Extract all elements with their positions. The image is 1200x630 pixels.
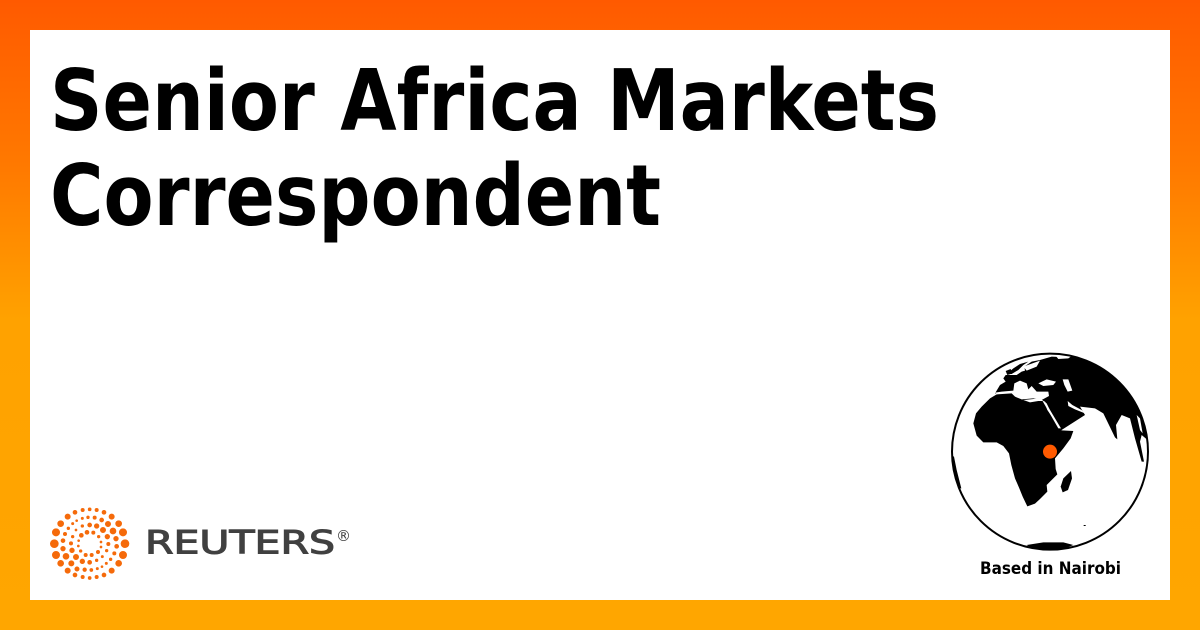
Scandinavia xyxy=(1007,362,1028,374)
Reuters wordmark: REUTERS xyxy=(145,524,335,562)
Madagascar xyxy=(1061,471,1072,492)
globe outline xyxy=(952,354,1148,550)
Antarctica xyxy=(1026,542,1074,549)
icon: Reuters dotted logo xyxy=(50,508,129,579)
Eurasia xyxy=(995,356,1146,462)
title xyxy=(50,52,939,246)
title: Correspondent xyxy=(50,147,661,246)
title: Senior Africa Markets xyxy=(50,52,939,151)
caption: Based in Nairobi xyxy=(980,559,1121,578)
small island xyxy=(1084,524,1086,527)
globe map xyxy=(948,348,1160,553)
Africa xyxy=(973,394,1073,506)
Reuters wordmark: ® xyxy=(336,527,351,545)
location marker: Nairobi xyxy=(1043,445,1057,459)
white seas xyxy=(995,355,1143,433)
British Isles xyxy=(1006,369,1012,375)
South America edge xyxy=(953,456,962,488)
land masses xyxy=(953,356,1146,549)
